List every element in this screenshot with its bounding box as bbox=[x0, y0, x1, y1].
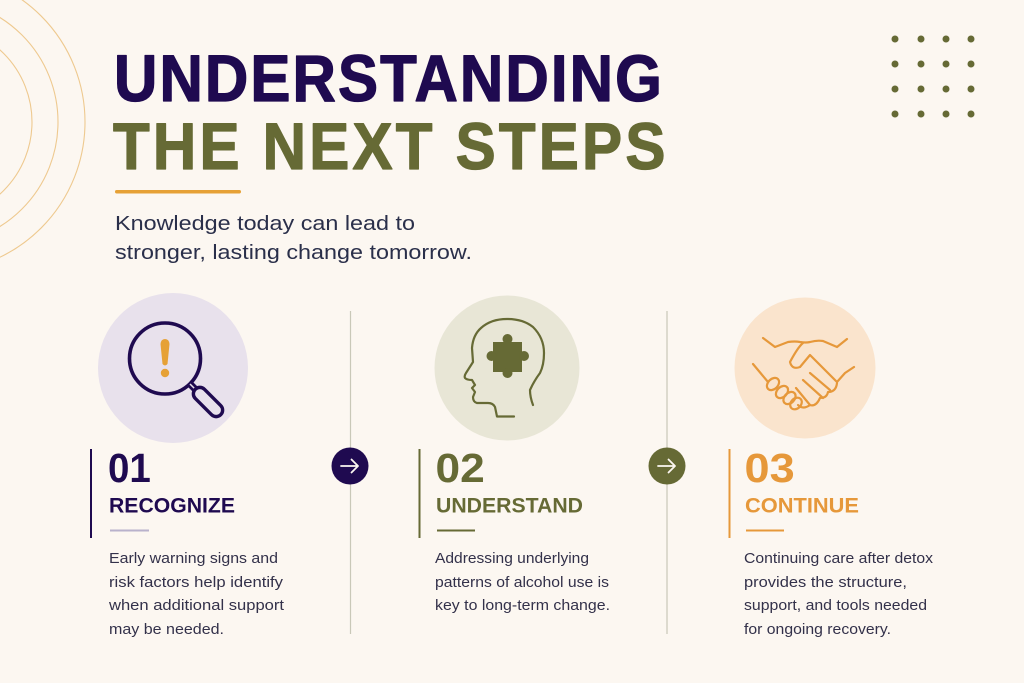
description bbox=[435, 551, 610, 614]
short rule bbox=[746, 530, 784, 532]
divider with arrow: step 2 to 3 bbox=[648, 311, 686, 634]
description: patterns of alcohol use is bbox=[435, 575, 609, 591]
title bbox=[113, 42, 665, 184]
description: may be needed. bbox=[109, 622, 224, 638]
title: UNDERSTANDING bbox=[114, 42, 662, 116]
icon: magnifying glass with exclamation bbox=[98, 293, 248, 443]
subtitle: Knowledge today can lead to bbox=[115, 212, 415, 235]
decorative dot grid bbox=[892, 36, 974, 118]
description: Early warning signs and bbox=[109, 551, 278, 567]
label: CONTINUE bbox=[745, 494, 859, 518]
accent bar bbox=[418, 449, 420, 538]
number: 02 bbox=[436, 445, 485, 492]
divider with arrow: step 1 to 2 bbox=[332, 311, 368, 634]
description: when additional support bbox=[108, 598, 284, 614]
subtitle bbox=[115, 212, 472, 264]
icon: head with puzzle piece bbox=[434, 296, 580, 440]
description: support, and tools needed bbox=[744, 598, 927, 614]
description: provides the structure, bbox=[744, 575, 907, 591]
number: 03 bbox=[744, 446, 795, 492]
panel: step 3 continue bbox=[728, 298, 934, 638]
description: Addressing underlying bbox=[435, 551, 589, 567]
icon: handshake bbox=[734, 298, 876, 438]
decorative concentric arcs bbox=[0, 0, 85, 272]
description: Continuing care after detox bbox=[744, 551, 934, 567]
number: 01 bbox=[108, 446, 151, 491]
label: UNDERSTAND bbox=[436, 494, 583, 518]
subtitle: stronger, lasting change tomorrow. bbox=[115, 241, 472, 264]
description: for ongoing recovery. bbox=[744, 622, 891, 638]
short rule bbox=[437, 530, 475, 532]
description: key to long-term change. bbox=[435, 598, 610, 614]
short rule bbox=[110, 530, 149, 532]
description bbox=[744, 551, 934, 638]
description: risk factors help identify bbox=[109, 575, 284, 591]
accent bar bbox=[728, 449, 730, 538]
accent bar bbox=[90, 449, 92, 538]
label: RECOGNIZE bbox=[109, 494, 235, 518]
panel: step 2 understand bbox=[418, 296, 610, 614]
description bbox=[108, 551, 284, 638]
panel: step 1 recognize bbox=[90, 293, 284, 638]
title: THE NEXT STEPS bbox=[113, 110, 665, 184]
title underline bbox=[115, 190, 241, 194]
